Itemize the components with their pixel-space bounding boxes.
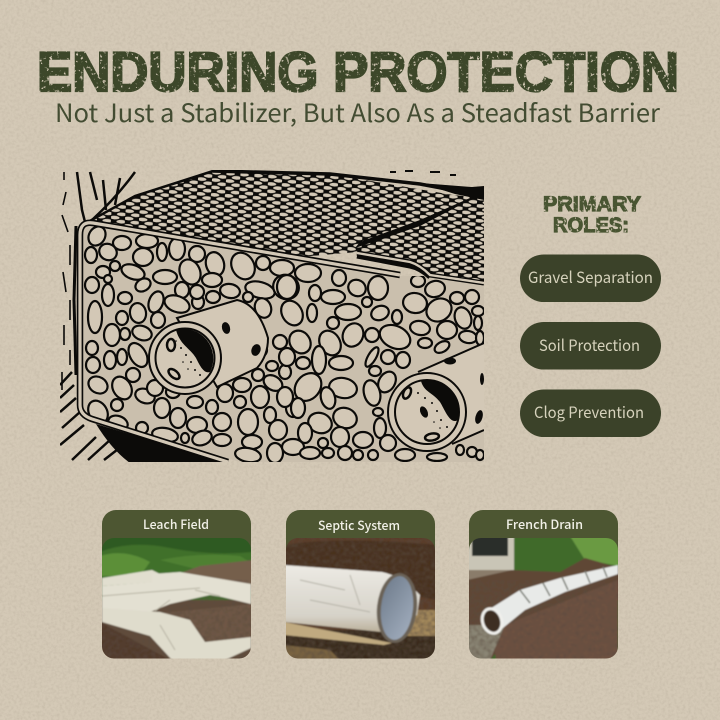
subtitle: Not Just a Stabilizer, But Also As a Steadfast Barrier xyxy=(55,94,660,130)
pill: clog prevention: Clog Prevention xyxy=(534,401,644,423)
mesh geotextile top layer xyxy=(88,170,484,284)
gravel stones xyxy=(84,223,484,464)
photo: fabric-wrapped leach field xyxy=(100,536,253,660)
geotextile liner edges xyxy=(80,223,484,462)
outer soil hatching, left and bottom xyxy=(60,172,228,463)
title: ENDURING PROTECTION xyxy=(37,40,679,103)
pill: soil protection: Soil Protection xyxy=(539,334,640,356)
card: leach field xyxy=(100,510,253,660)
photo: wrapped concrete pipe xyxy=(284,536,437,660)
pill: gravel separation xyxy=(520,254,661,302)
photo: french drain pipe in trench xyxy=(467,536,620,660)
perforated pipe right xyxy=(388,343,484,451)
pill: clog prevention xyxy=(520,390,661,437)
card title: Leach Field xyxy=(143,514,209,533)
card title: French Drain xyxy=(506,514,583,533)
card title: Septic System xyxy=(318,515,400,534)
perforated pipe left xyxy=(149,300,268,394)
heading: primary roles xyxy=(543,193,641,237)
pill: gravel separation: Gravel Separation xyxy=(528,266,653,288)
card: septic system xyxy=(284,510,437,660)
gravel bed fill xyxy=(80,224,484,462)
card: french drain xyxy=(467,510,620,660)
heading: primary roles: PRIMARY xyxy=(543,193,641,216)
heading: primary roles: ROLES: xyxy=(553,214,629,237)
illustration: cross-section of gravel trench with perforated pipes and geotextile xyxy=(60,170,484,464)
pill: soil protection xyxy=(520,322,661,370)
